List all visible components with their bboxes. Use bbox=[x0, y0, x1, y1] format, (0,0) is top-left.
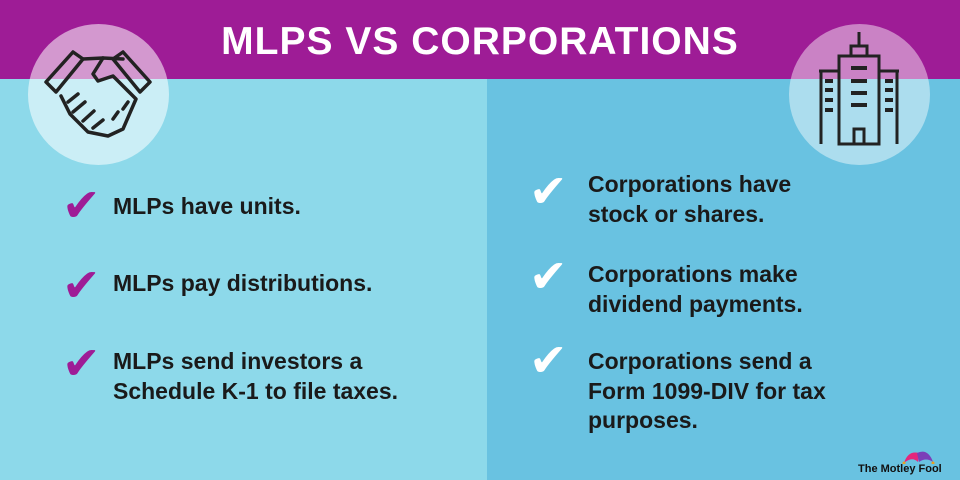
text 1: MLPs have units. bbox=[113, 193, 301, 219]
check 3: ✔ bbox=[529, 333, 568, 387]
right checklist bbox=[529, 164, 826, 433]
check 3: ✔ bbox=[62, 336, 101, 390]
text 2: dividend payments. bbox=[588, 290, 803, 316]
icon: handshake bbox=[28, 24, 169, 165]
logo: The Motley Fool: The Motley Fool bbox=[858, 463, 942, 475]
text 2 bbox=[588, 261, 803, 317]
text 3 bbox=[588, 348, 826, 433]
logo: The Motley Fool bbox=[858, 452, 942, 475]
panel: left MLPs bbox=[0, 0, 487, 480]
text 3: MLPs send investors a bbox=[113, 348, 362, 374]
icon: building bbox=[789, 24, 930, 165]
check 1: ✔ bbox=[529, 164, 568, 218]
text 1 bbox=[588, 171, 791, 226]
text 3 bbox=[113, 348, 398, 404]
text 3: Schedule K-1 to file taxes. bbox=[113, 378, 398, 404]
text 1: stock or shares. bbox=[588, 200, 764, 226]
text 2: MLPs pay distributions. bbox=[113, 270, 372, 296]
title: MLPS VS CORPORATIONS bbox=[221, 20, 739, 63]
text 3: Corporations send a bbox=[588, 348, 812, 374]
panel: right corporations bbox=[487, 0, 960, 480]
check 1: ✔ bbox=[62, 178, 101, 232]
left checklist bbox=[62, 178, 398, 404]
header banner bbox=[0, 0, 960, 79]
check 2: ✔ bbox=[529, 249, 568, 303]
check 2: ✔ bbox=[62, 258, 101, 312]
text 3: Form 1099-DIV for tax bbox=[588, 378, 826, 404]
text 3: purposes. bbox=[588, 407, 698, 433]
text 1: Corporations have bbox=[588, 171, 791, 197]
text 2: Corporations make bbox=[588, 261, 798, 287]
